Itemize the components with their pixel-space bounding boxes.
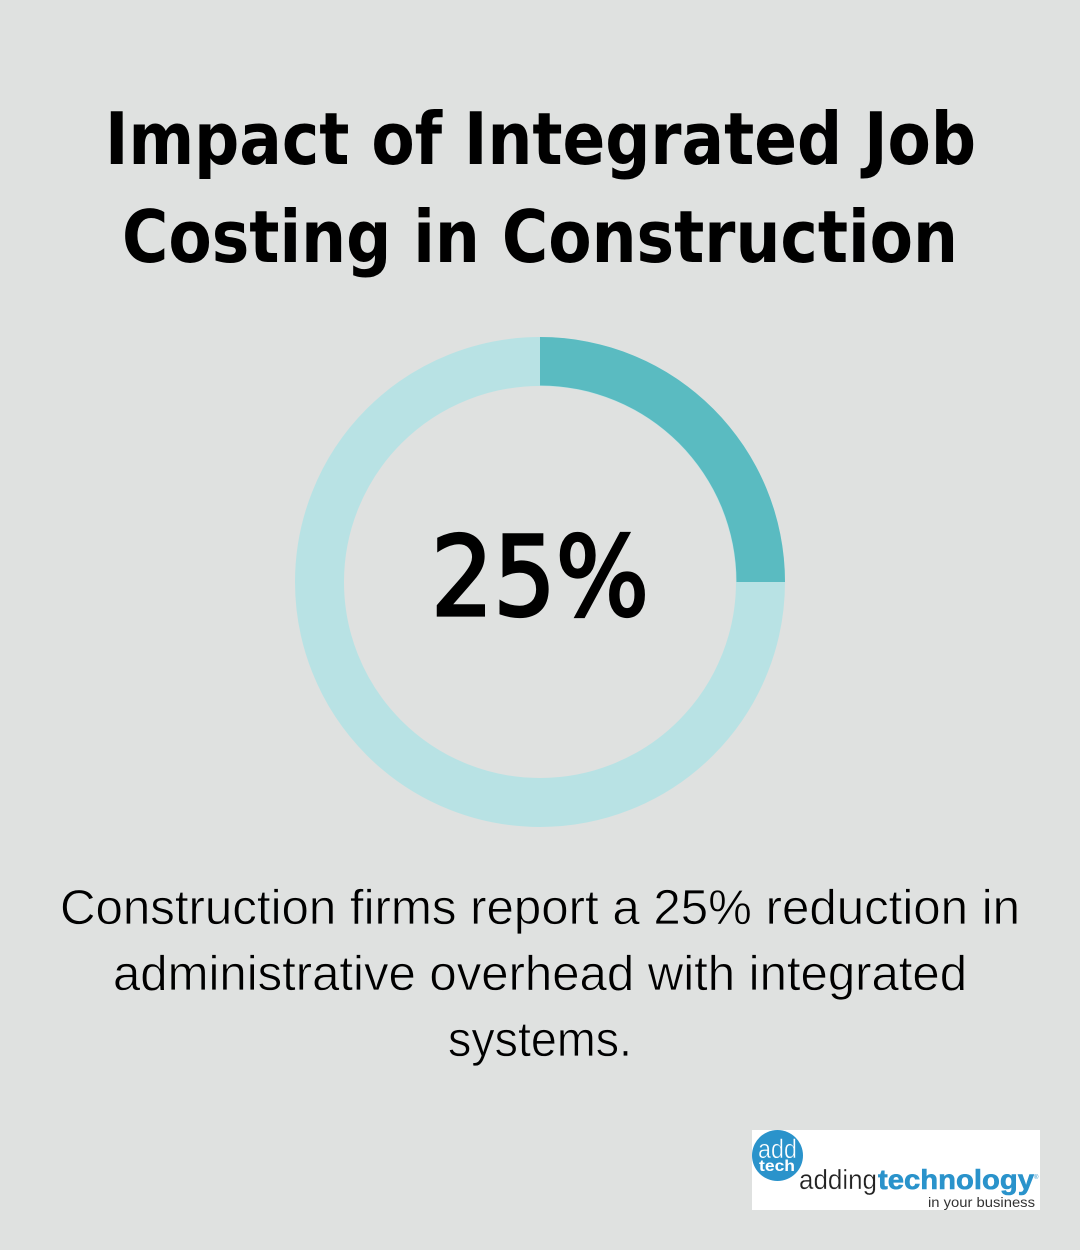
- big number: 25%: [431, 513, 649, 641]
- description text: systems.: [448, 1013, 632, 1067]
- logo: adding technology: [752, 1130, 1040, 1210]
- title: Costing in Construction: [122, 195, 958, 279]
- description text: [60, 881, 1020, 1067]
- title: [105, 97, 976, 279]
- logo badge: [752, 1130, 803, 1181]
- description text: Construction firms report a 25% reduction in: [60, 881, 1020, 935]
- logo wordmark: adding: [799, 1164, 877, 1195]
- donut chart: 25%: [320, 337, 785, 802]
- logo wordmark: [799, 1164, 1039, 1195]
- donut segment: highlighted quarter: [540, 337, 785, 582]
- logo wordmark: ®: [1034, 1174, 1039, 1181]
- title: Impact of Integrated Job: [105, 97, 976, 181]
- description text: administrative overhead with integrated: [113, 947, 967, 1001]
- logo tagline: in your business: [928, 1194, 1035, 1210]
- logo wordmark: technology: [878, 1164, 1034, 1195]
- logo badge: tech: [759, 1158, 795, 1175]
- logo badge: add: [758, 1134, 797, 1164]
